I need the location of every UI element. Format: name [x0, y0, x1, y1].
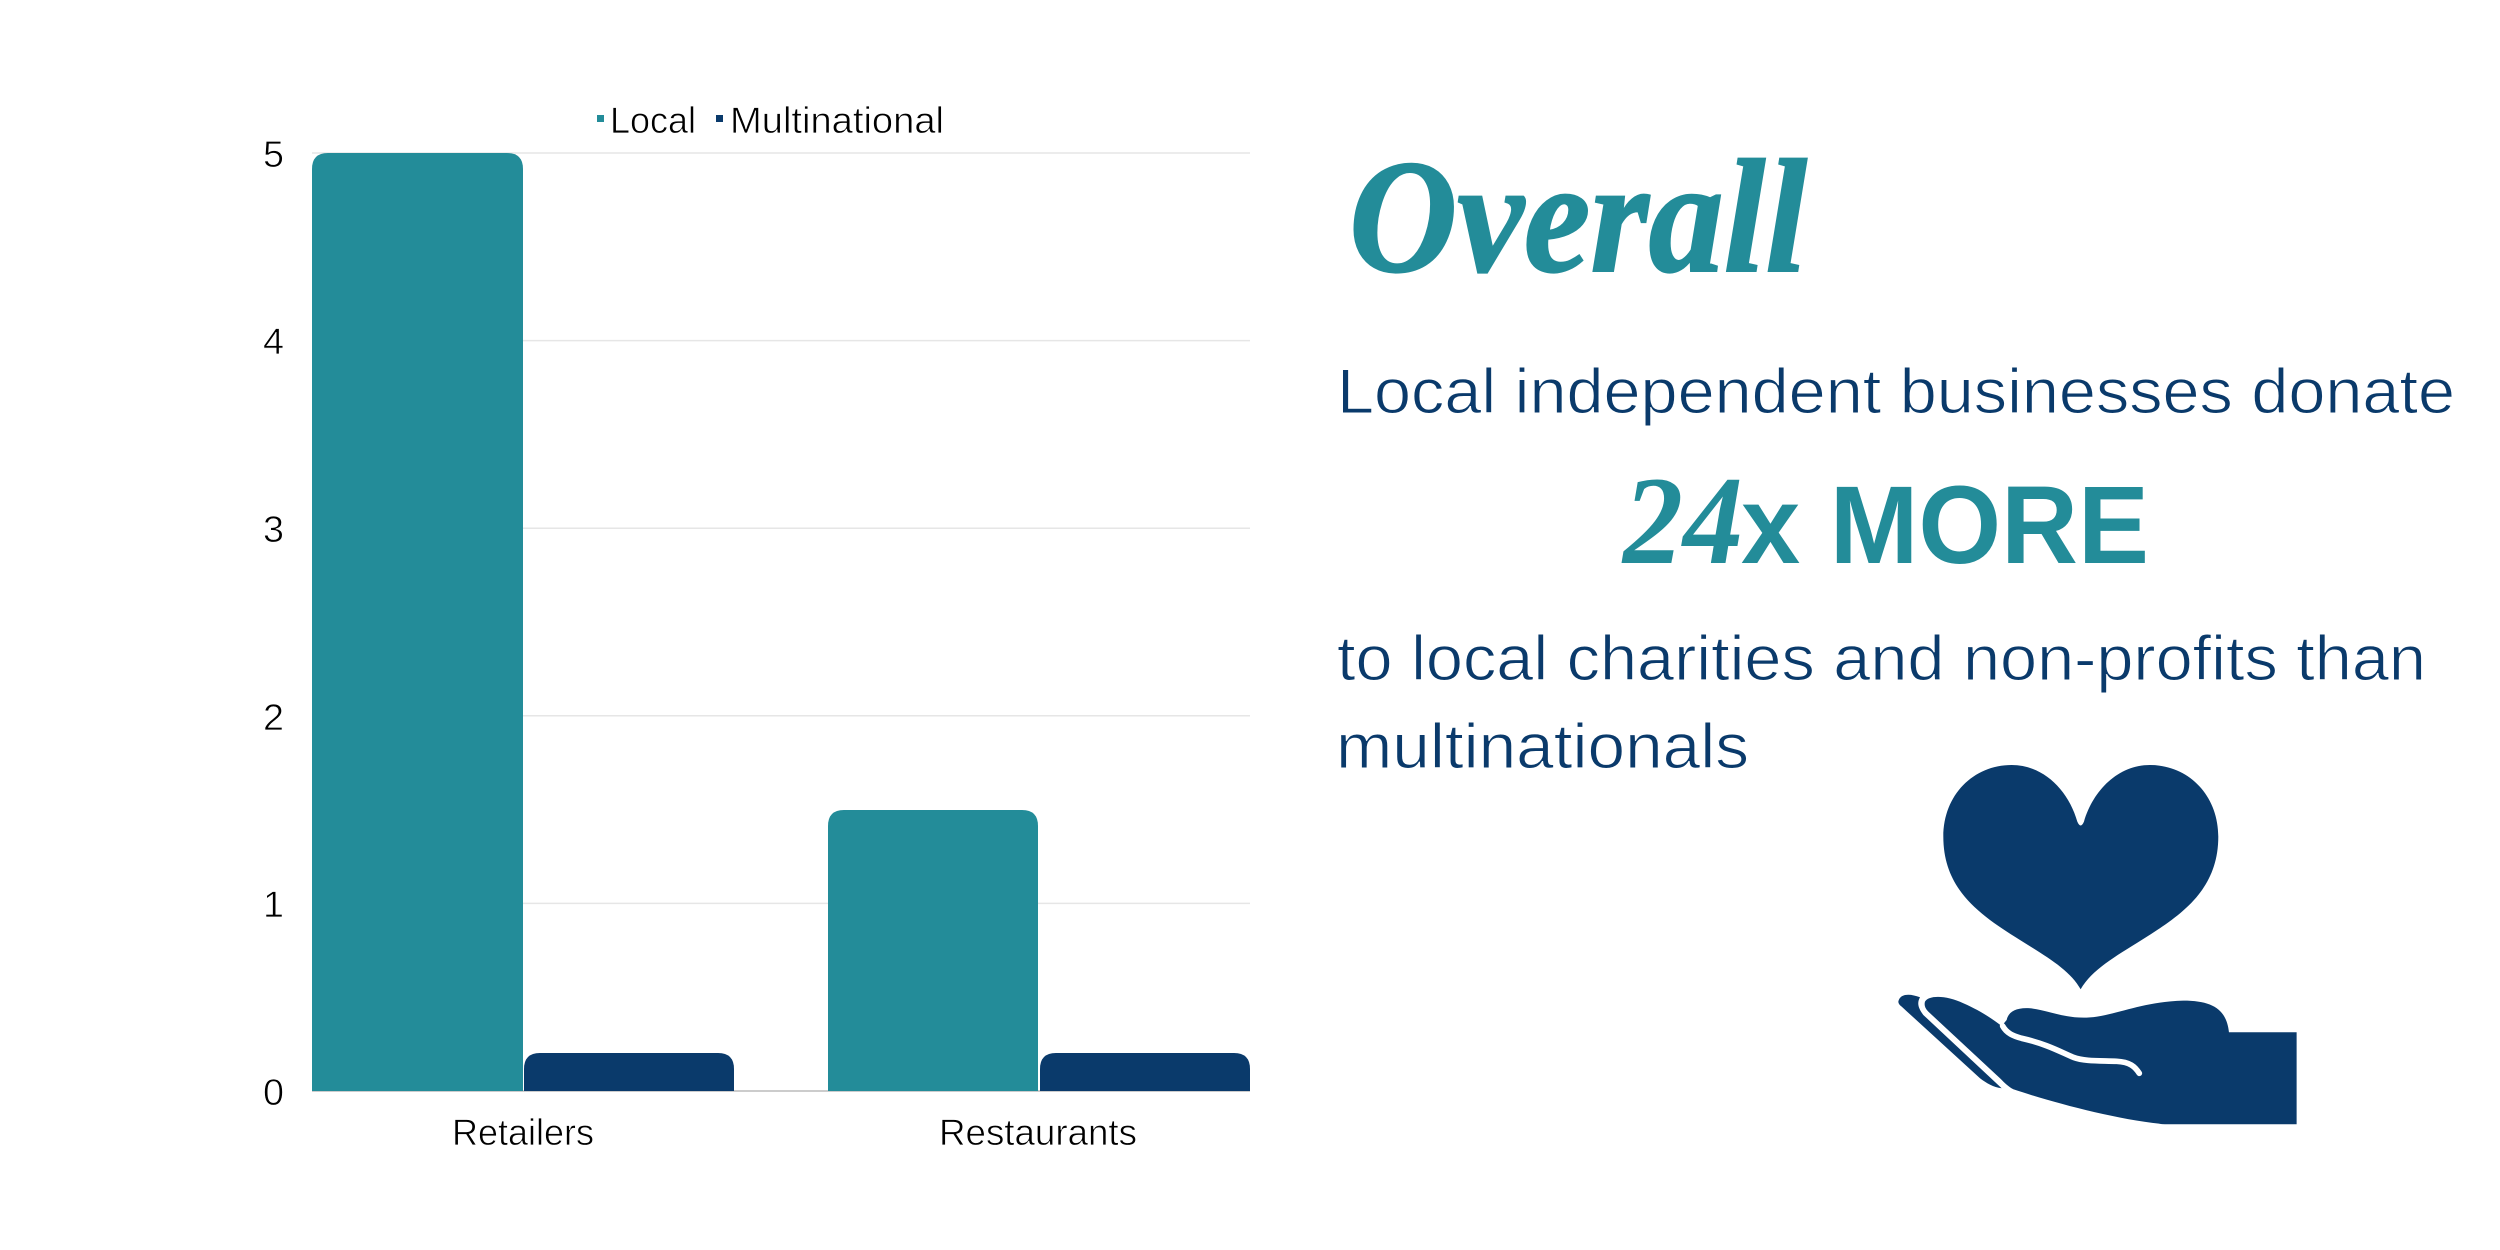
- y axis labels: 2: [263, 697, 284, 738]
- y axis labels: 0: [263, 1072, 284, 1113]
- x axis label: retailers: Retailers: [452, 1112, 594, 1153]
- legend label: multinational: Multinational: [730, 100, 944, 141]
- bar: retailers local, 5: [312, 153, 523, 1091]
- text: to local charities and non-profits than multinationals: [1336, 624, 2426, 782]
- callout text: x more: x MORE: [1741, 464, 2149, 587]
- icon: hand: [1898, 995, 2297, 1124]
- legend swatch: local: [597, 115, 604, 122]
- text: to local charities and non-profits than multinationals: to local charities and non-profits than: [1337, 624, 2426, 694]
- bar: restaurants multinational, 0.2: [1040, 1053, 1250, 1091]
- bar: retailers multinational, 0.2: [524, 1053, 734, 1091]
- y axis labels: 3: [263, 509, 284, 550]
- icon: heart over open hand: [1898, 765, 2297, 1124]
- y axis labels: 1: [263, 884, 284, 925]
- callout: 24x more: [1621, 452, 2149, 591]
- legend swatch: multinational: [716, 115, 723, 122]
- legend label: local: Local: [610, 100, 696, 141]
- chart legend: [597, 100, 944, 141]
- heading: Overall: Overall: [1349, 128, 1807, 307]
- text: to local charities and non-profits than multinationals: multinationals: [1336, 712, 1749, 782]
- text: local independent businesses donate: Local independent businesses donate: [1337, 357, 2455, 427]
- x axis label: restaurants: Restaurants: [939, 1112, 1137, 1153]
- y axis labels: 4: [263, 321, 284, 362]
- y axis labels: 5: [263, 134, 284, 175]
- y axis labels: [263, 134, 284, 1113]
- bar: restaurants local, 1.5: [828, 810, 1038, 1091]
- panel: bar chart: [263, 100, 1250, 1153]
- callout number: 24: 24: [1621, 452, 1743, 591]
- icon: heart: [1943, 765, 2218, 989]
